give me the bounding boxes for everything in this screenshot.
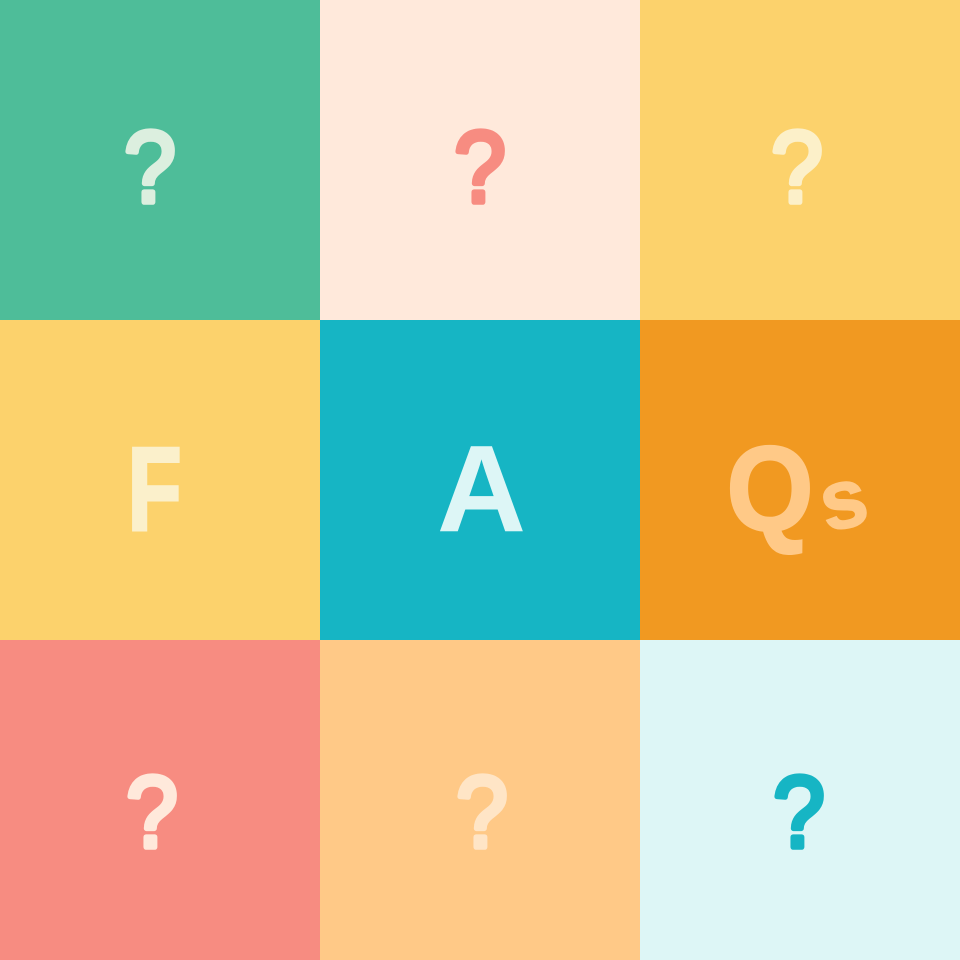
panel: coral question tile: [0, 640, 320, 960]
panel: light orange question tile: [320, 640, 640, 960]
panel: letter F tile: [0, 320, 320, 640]
icon: question mark on yellow: ?: [771, 110, 823, 224]
panel: yellow question tile: [640, 0, 960, 320]
panel: light aqua question tile: [640, 640, 960, 960]
panel: letter A tile: [320, 320, 640, 640]
panel: letters Qs tile: [640, 320, 960, 640]
heading: letter A: A: [437, 420, 526, 558]
heading: letter F: F: [127, 424, 182, 556]
icon: question mark on coral: ?: [126, 755, 178, 869]
icon: question mark on light aqua: ?: [773, 755, 825, 869]
panel: green question tile: [0, 0, 320, 320]
icon: question mark on green: ?: [124, 110, 176, 224]
heading: letters Qs: [726, 420, 876, 556]
icon: question mark on peach: ?: [454, 110, 506, 224]
heading: letters Qs: Q: [726, 420, 814, 556]
heading: letters Qs: s: [810, 448, 876, 549]
panel: peach question tile: [320, 0, 640, 320]
icon: question mark on light orange: ?: [456, 755, 508, 869]
